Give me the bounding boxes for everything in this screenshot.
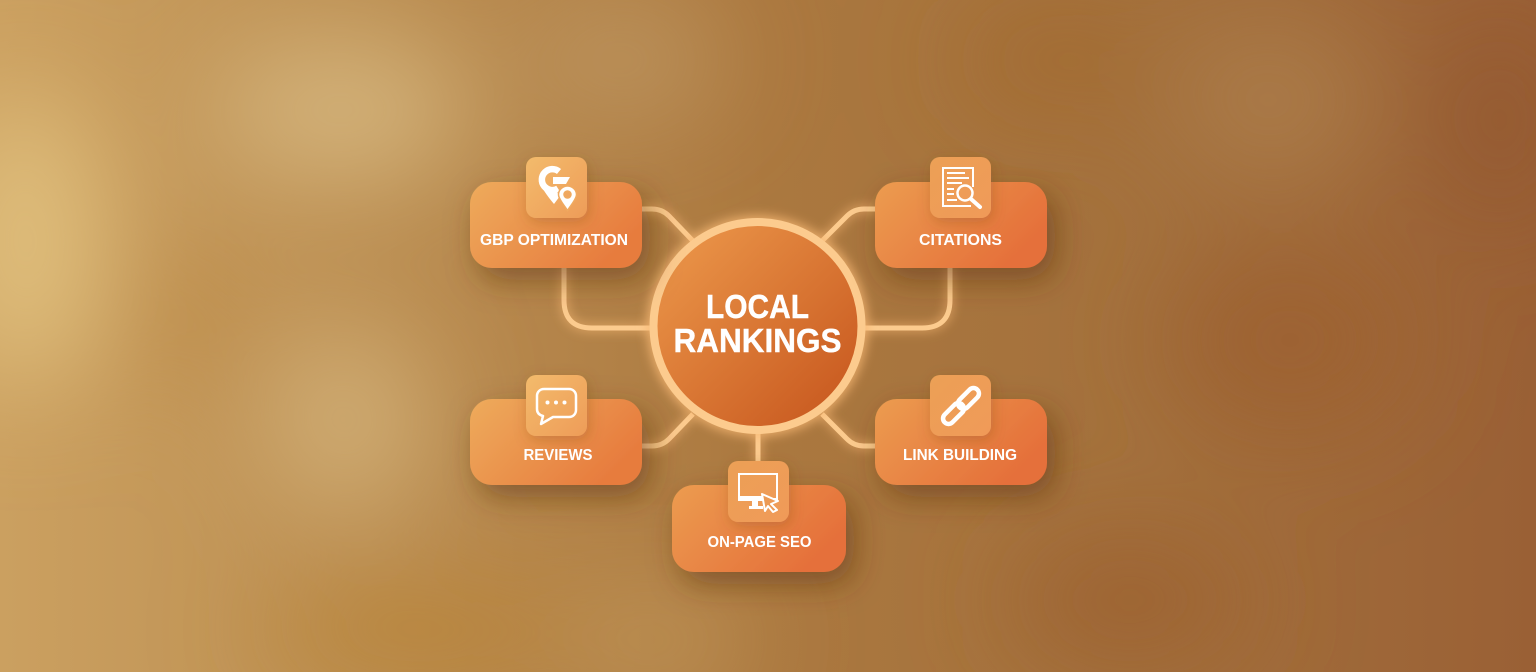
- label: GBP optimization: GBP OPTIMIZATION: [480, 232, 628, 249]
- label: citations: CITATIONS: [919, 232, 1002, 249]
- card: on-page SEO: [672, 461, 846, 572]
- central circle: local rankings: [646, 215, 868, 437]
- connector: on-page SEO: [756, 430, 760, 465]
- icon: monitor with cursor: [738, 474, 778, 512]
- connectors: [564, 209, 950, 465]
- icon: document with magnifier: [943, 168, 980, 207]
- card: link building: [875, 375, 1047, 485]
- label: reviews: REVIEWS: [524, 447, 593, 464]
- connector: citations upper: [822, 209, 877, 241]
- connector: GBP optimization upper: [640, 209, 693, 241]
- card: GBP optimization: [470, 157, 642, 268]
- icon: chain link: [941, 386, 981, 426]
- heading: local rankings: RANKINGS: [674, 322, 842, 359]
- label: link building: LINK BUILDING: [903, 447, 1017, 464]
- connector: GBP optimization lower: [564, 266, 655, 328]
- heading: local rankings: LOCAL: [706, 288, 809, 325]
- card: reviews: [470, 375, 642, 485]
- icon: G with map pin: [540, 169, 576, 210]
- connector: reviews: [640, 414, 693, 446]
- connector: citations lower: [860, 266, 950, 328]
- icon: speech bubble: [537, 389, 576, 424]
- connector: link building: [822, 414, 877, 446]
- heading: local rankings: [674, 288, 842, 359]
- label: on-page SEO: ON-PAGE SEO: [708, 534, 812, 551]
- card: citations: [875, 157, 1047, 268]
